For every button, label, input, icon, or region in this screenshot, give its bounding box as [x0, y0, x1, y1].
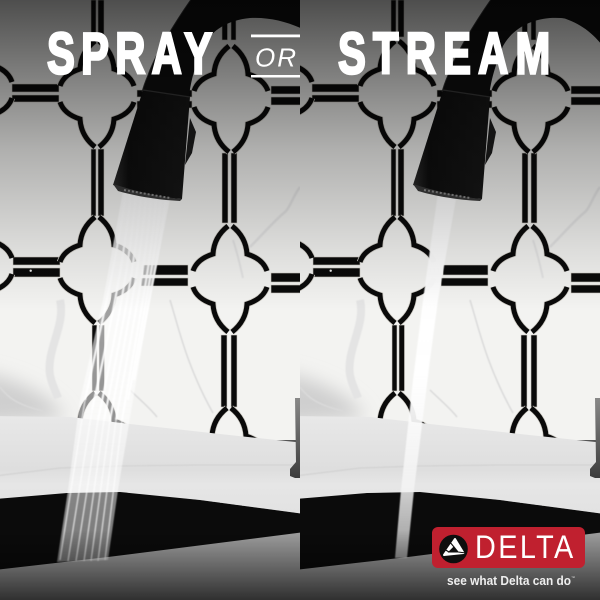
top shading: [0, 0, 600, 310]
heading: or: [251, 34, 300, 78]
backsplash tiles: [0, 0, 300, 506]
panel: spray: [0, 0, 331, 600]
spray water: [57, 191, 170, 562]
heading: stream: STREAM: [338, 21, 557, 86]
stream water: [395, 192, 456, 558]
logo: Delta badge: [432, 527, 585, 568]
icon: faucet stream head: [413, 0, 600, 201]
bottom shading: [0, 530, 600, 600]
logo: Delta badge: DELTA: [475, 530, 576, 565]
tagline: ™: [571, 575, 575, 580]
icon: faucet spray head: [113, 0, 305, 201]
tagline: see what Delta can do: [447, 574, 571, 588]
heading: spray: SPRAY: [47, 21, 218, 86]
countertop and sink: [295, 398, 600, 600]
icon: Delta mark: [439, 535, 468, 563]
panel: stream: [300, 0, 600, 600]
backsplash tiles: [300, 0, 600, 506]
heading: or: OR: [255, 42, 298, 72]
countertop and sink: [0, 398, 305, 600]
